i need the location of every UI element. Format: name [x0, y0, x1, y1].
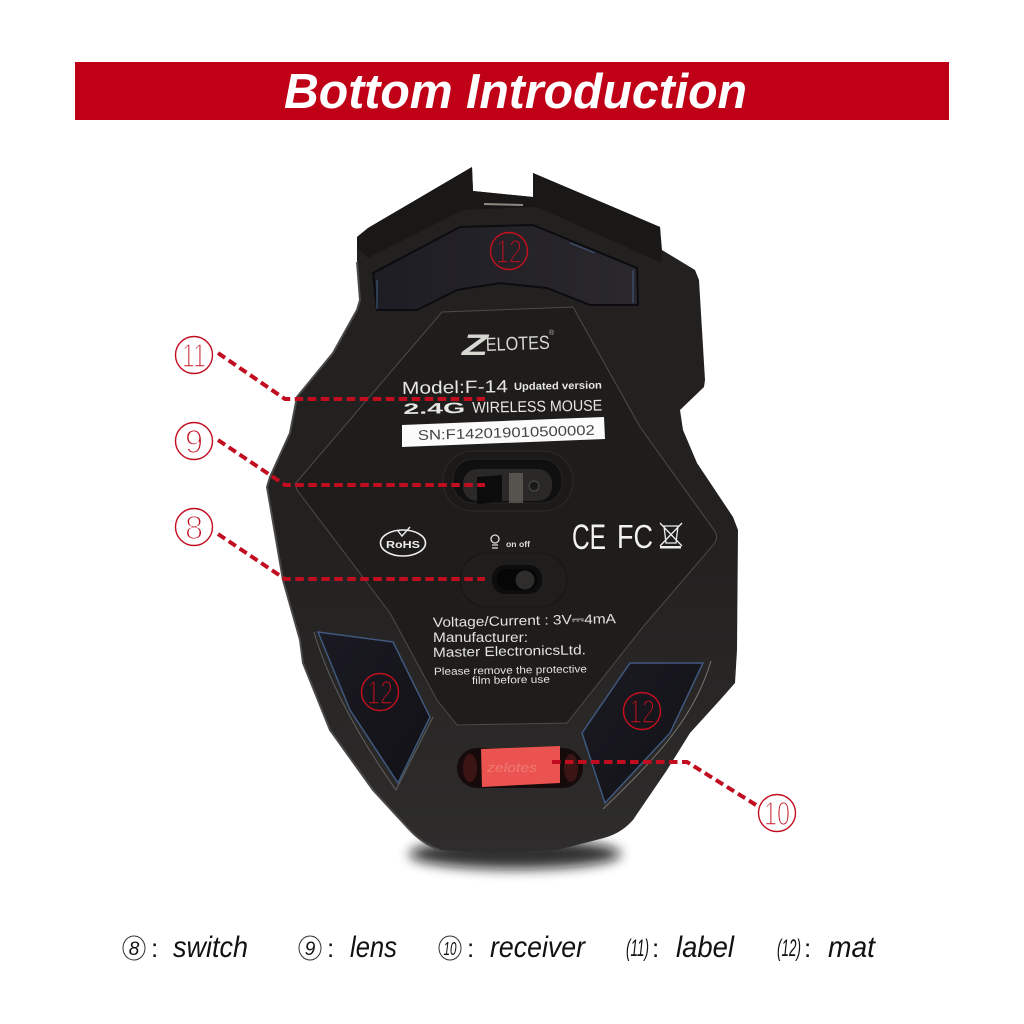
- power lamp icon: [491, 535, 499, 548]
- lens window: [443, 451, 573, 511]
- left glide pad: [314, 632, 433, 790]
- specification text: Please remove the protective: [434, 663, 587, 678]
- callout: switch 8: [176, 508, 485, 579]
- callout: lens 9: [176, 422, 485, 485]
- legend: lens: :: [327, 933, 334, 963]
- brand logo: Z: [461, 329, 490, 362]
- legend: switch: [123, 931, 248, 964]
- model text: Model:F-14: [402, 376, 508, 398]
- legend: label: :: [652, 933, 659, 963]
- registered mark: ®: [549, 329, 555, 337]
- title banner: Bottom Introduction: [284, 65, 747, 119]
- FC mark: FC: [617, 518, 653, 555]
- legend: lens: 9: [305, 939, 316, 960]
- callout: receiver 10: [552, 762, 796, 832]
- model text: Updated version: [514, 380, 602, 393]
- callout: label 11: [176, 336, 485, 399]
- brand logo: ELOTES: [485, 333, 550, 356]
- left edge highlight: [267, 262, 440, 850]
- legend: switch: :: [151, 933, 158, 963]
- legend: label: [626, 931, 735, 964]
- serial number label: SN:F142019010500002: [418, 422, 595, 443]
- legend: lens: lens: [350, 931, 397, 964]
- mouse body: [267, 167, 738, 853]
- top glide pad: [373, 225, 638, 310]
- legend: receiver: receiver: [490, 931, 586, 964]
- brand logo: [461, 329, 550, 362]
- serial number label: [402, 417, 605, 447]
- RoHS mark: [380, 527, 426, 556]
- shadow under mouse: [409, 839, 621, 869]
- legend: mat: [777, 931, 877, 964]
- number 12 right: 12: [629, 693, 655, 730]
- legend: mat: :: [804, 933, 811, 963]
- title banner: [75, 62, 949, 120]
- legend: label: (11): [626, 935, 649, 962]
- specification text: Master ElectronicsLtd.: [433, 642, 586, 660]
- scroll notch detail: [484, 204, 523, 205]
- specification text: Manufacturer:: [433, 630, 528, 645]
- receiver slot: [457, 746, 583, 788]
- power switch: [460, 553, 567, 607]
- callout: lens 9: 9: [185, 423, 203, 460]
- legend: lens: [299, 931, 397, 964]
- callout: switch 8: 8: [185, 509, 203, 546]
- legend: receiver: :: [467, 933, 474, 963]
- top shroud: [357, 167, 662, 263]
- legend: mat: (12): [777, 935, 801, 962]
- number 12 left: 12: [367, 674, 393, 711]
- model text: [402, 375, 602, 418]
- model text: WIRELESS MOUSE: [472, 398, 602, 417]
- specification text: film before use: [472, 674, 550, 687]
- callout: label 11: 11: [182, 337, 206, 374]
- on off text: on off: [506, 539, 530, 549]
- legend: [123, 931, 877, 964]
- RoHS mark: RoHS: [386, 539, 420, 551]
- legend: receiver: [439, 931, 586, 964]
- mouse underside photo: [267, 167, 738, 869]
- right glide pad: [582, 661, 711, 809]
- specification text: Voltage/Current : 3V⎓4mA: [433, 611, 616, 630]
- WEEE bin icon: [660, 523, 682, 548]
- legend: label: label: [676, 931, 735, 964]
- receiver slot: zelotes: [486, 760, 538, 775]
- specification text: [433, 611, 616, 687]
- legend: receiver: 10: [444, 939, 456, 959]
- number 12 top: 12: [496, 233, 522, 270]
- label panel outline: [295, 307, 716, 725]
- callout: receiver 10: 10: [764, 795, 790, 832]
- CE mark: CE: [572, 518, 606, 557]
- legend: mat: mat: [828, 931, 877, 964]
- legend: switch: 8: [129, 939, 140, 960]
- legend: switch: switch: [173, 931, 248, 964]
- model text: 2.4G: [403, 400, 465, 418]
